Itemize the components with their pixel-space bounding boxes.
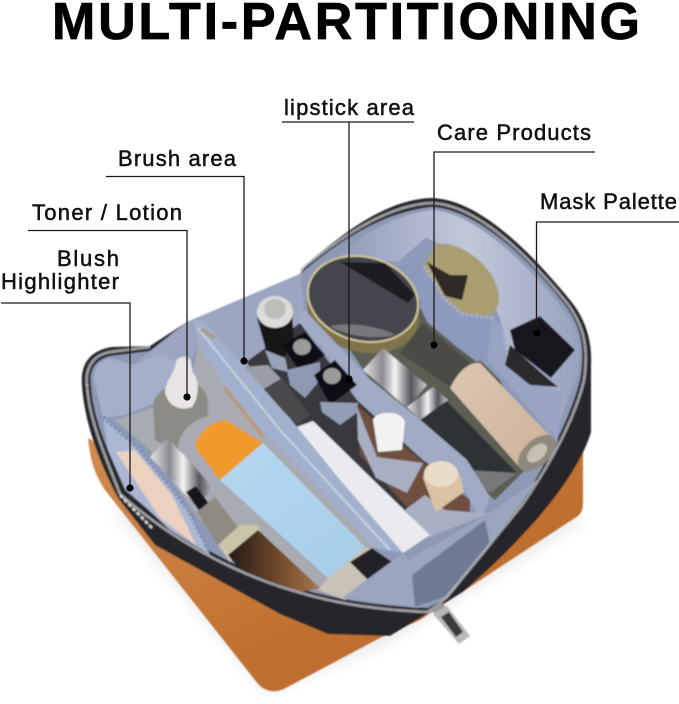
clear pocket window (115, 343, 375, 590)
dark glass bottle (407, 387, 517, 493)
blue sunscreen bottle (220, 443, 365, 578)
silver rim of sunscreen bottle (178, 417, 265, 490)
front elastic pocket (103, 417, 210, 555)
amber glass in pocket (222, 380, 270, 438)
back compartment floor (325, 300, 535, 500)
back flap lining (133, 274, 320, 400)
label: Brush area: Brush area (118, 146, 237, 171)
label: lipstick area (282, 95, 415, 383)
small pocket with bottles (357, 405, 490, 537)
serum dropper bottle (186, 486, 320, 592)
white long tube (297, 421, 430, 553)
lid lining highlight (330, 210, 580, 420)
label: Mask Palette (533, 189, 679, 337)
front grey fold (342, 480, 537, 608)
black trim band (82, 198, 591, 636)
gold compact behind elastic (407, 229, 513, 333)
brand lettering on rim (120, 495, 152, 528)
silver zipper (87, 203, 586, 612)
lipstick cube one (282, 332, 325, 398)
white-capped lipstick (257, 296, 294, 372)
back elastic pocket (400, 237, 493, 362)
left inner back lining (94, 355, 190, 418)
floor near bottle base (318, 547, 393, 600)
middle divider (300, 305, 490, 520)
label: Mask Palette: Mask Palette (540, 189, 677, 214)
grey-blue lining (91, 207, 582, 608)
label: Toner / Lotion (28, 200, 191, 401)
label: Care Products: Care Products (437, 120, 591, 145)
round mirror compact (297, 243, 429, 365)
bag shadow (110, 500, 590, 695)
zipper pull (430, 601, 470, 644)
label: Brush area (106, 146, 248, 365)
photo: open cosmetic bag (82, 198, 591, 695)
orange cap (195, 420, 263, 480)
mask palette (505, 316, 575, 387)
label: Blush Highlighter: Blush (57, 246, 119, 271)
label: lipstick area: lipstick area (284, 95, 415, 120)
label: Blush Highlighter: Highlighter (1, 269, 119, 294)
right elastic pocket (487, 318, 561, 445)
label: Blush Highlighter (1, 246, 134, 492)
label: Care Products (430, 120, 595, 349)
dark bottle neck beside sunscreen (350, 548, 392, 582)
dark floor of middle row (246, 323, 463, 535)
beige foundation bottle (450, 363, 563, 478)
orange leather body (88, 438, 583, 691)
label: Toner / Lotion: Toner / Lotion (32, 200, 182, 225)
darker fold (412, 520, 490, 607)
brush handle and glass (245, 365, 310, 425)
lipstick cube two (314, 360, 358, 425)
dark tube (400, 323, 470, 387)
silver bottle highlighter (150, 438, 216, 505)
zipper divider band (193, 320, 403, 553)
dropper bottle toner (153, 357, 208, 455)
silver tube (363, 348, 427, 408)
